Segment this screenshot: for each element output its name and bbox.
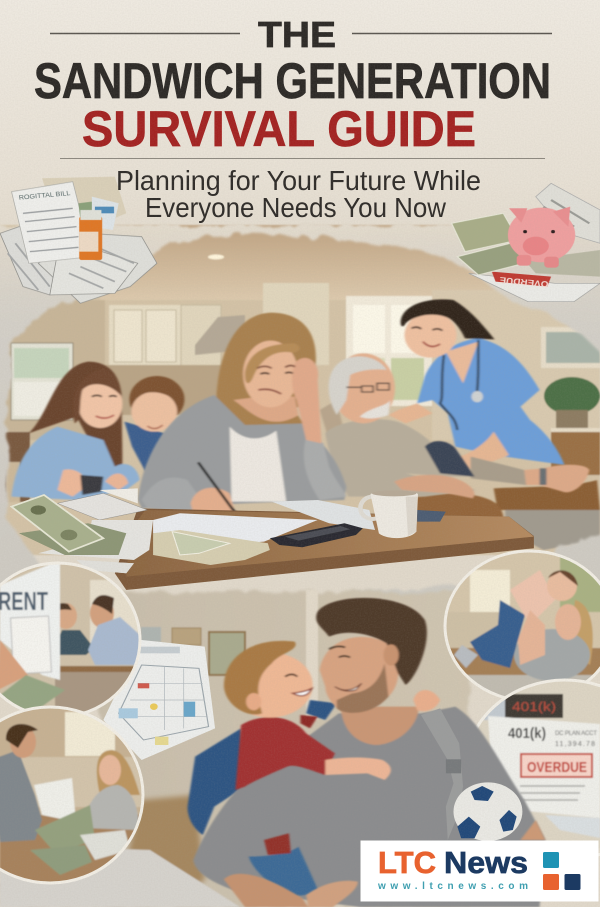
LTC News logo: LTC: [378, 845, 436, 880]
cash, overdue notice and piggy bank: OVERDUE: [499, 275, 549, 289]
torn speckled frame around kitchen: [0, 225, 600, 610]
stack of cash on table: [19, 523, 270, 565]
coffee mug: [360, 490, 418, 538]
mother: [138, 313, 346, 518]
notebook: [57, 488, 147, 520]
son: [224, 641, 440, 897]
inset circle: couple reviewing finances: [0, 705, 150, 885]
inset circle: 401(k) and overdue bills: DC PLAN ACCT: [555, 731, 597, 737]
cash spilling on the left edge: [11, 495, 134, 573]
wall planner board: [103, 640, 215, 760]
calculator: [270, 523, 363, 547]
scattered paperwork: [38, 500, 446, 573]
soccer ball: [453, 782, 522, 841]
subtitle: Everyone Needs You Now: [145, 192, 447, 223]
paper pile: hospital bill and medication: ROGITTAL BILL: [19, 191, 71, 202]
cash, overdue notice and piggy bank: [452, 183, 600, 302]
subtitle: [116, 165, 481, 223]
kitchen background scene: [0, 225, 600, 555]
subtitle: Planning for Your Future While: [116, 165, 481, 196]
father's head: [316, 598, 427, 713]
LTC News logo: www.ltcnews.com: [377, 881, 528, 892]
header rules: [50, 34, 552, 158]
inset circle: rent and adviser: [0, 562, 142, 713]
grandfather: [325, 353, 589, 498]
title: THE: [258, 14, 336, 55]
inset circle: rent and adviser: RENT: [0, 586, 48, 616]
father carrying son: [188, 598, 545, 907]
father's arm and hand: [224, 820, 545, 907]
inset circle: 401(k) and overdue bills: 401(k): [508, 725, 546, 742]
inset circle: 401(k) and overdue bills: [476, 678, 600, 856]
LTC News logo: [360, 840, 598, 902]
LTC News logo: News: [444, 845, 528, 880]
inset circle: 401(k) and overdue bills: OVERDUE: [527, 759, 587, 776]
paper pile: hospital bill and medication: [0, 177, 157, 303]
inset circle: 401(k) and overdue bills: 11,394.78: [555, 741, 595, 748]
inset circle: mother lifting child: [440, 548, 600, 708]
lower scene backdrop: [0, 590, 470, 907]
father's body: [193, 707, 545, 907]
backpack: [188, 700, 337, 835]
backpack strap: [421, 708, 463, 840]
sofa and grandfather's legs: [320, 400, 600, 550]
title: [34, 14, 551, 157]
wooden table: [115, 508, 534, 590]
inset circle: 401(k) and overdue bills: 401(k): [512, 699, 556, 714]
nurse: [388, 299, 564, 473]
boy: [124, 376, 184, 472]
family scene around the table: [11, 299, 600, 590]
girl: [11, 362, 140, 500]
title: SURVIVAL GUIDE: [82, 101, 476, 157]
